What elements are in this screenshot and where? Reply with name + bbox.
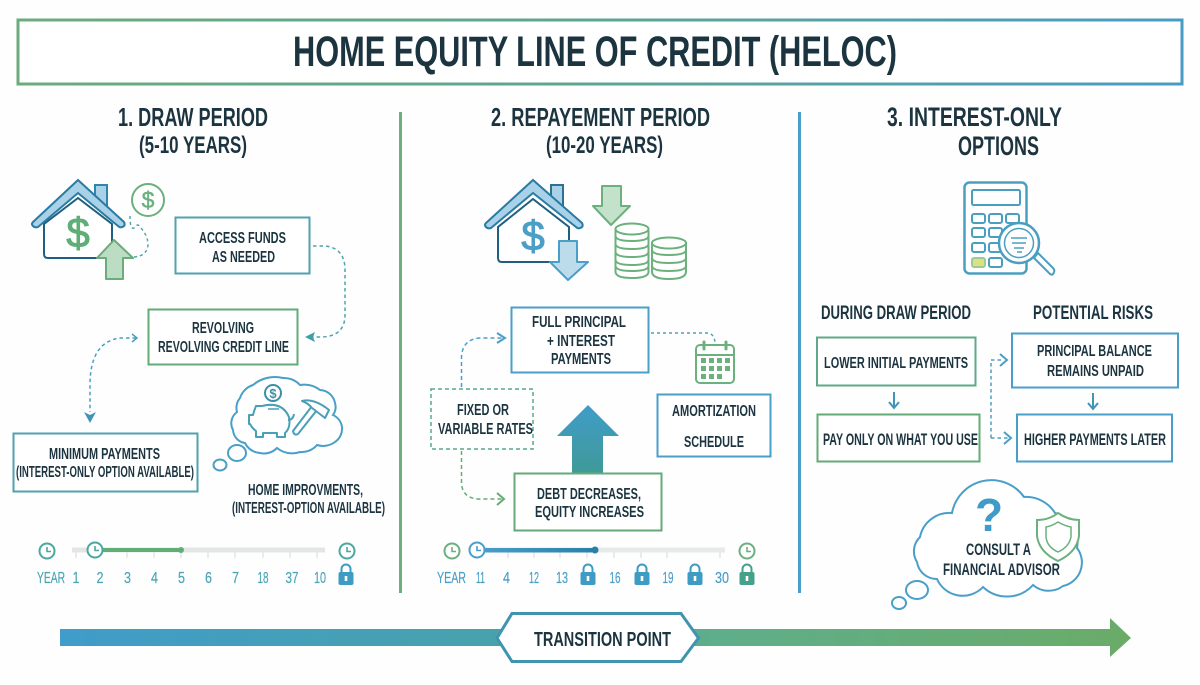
- callout: consult a financial advisor: CONSULT A: [966, 541, 1031, 559]
- box: debt decreases equity increases: EQUITY INCREASES: [535, 504, 644, 521]
- box: pay only on what you use: PAY ONLY ON WHAT YOU USE: [823, 431, 978, 449]
- heading: draw period: (5-10 YEARS): [139, 132, 247, 159]
- timeline: draw period years: 18: [258, 570, 269, 587]
- timeline: draw period years: YEAR: [37, 570, 65, 587]
- icon: house with dollar and down arrow: [485, 180, 588, 280]
- title banner: [18, 20, 1182, 84]
- box: lower initial payments: LOWER INITIAL PAYMENTS: [824, 355, 968, 372]
- box: debt decreases equity increases: DEBT DECREASES,: [537, 486, 641, 503]
- heading: draw period: [118, 102, 268, 159]
- timeline: repayment period years: YEAR: [437, 570, 466, 587]
- box: minimum payments: (INTEREST-ONLY OPTION AVAILABLE): [16, 464, 194, 481]
- arrow: lower payments to pay only: [889, 392, 899, 408]
- arrow: revolving line to minimum payments: [84, 334, 137, 423]
- icon: question mark: ?: [975, 489, 1003, 541]
- icon: dollar coin: $: [142, 187, 155, 213]
- timeline: draw period years: 2: [96, 570, 104, 587]
- heading: repayment period: (10-20 YEARS): [546, 132, 663, 159]
- box: minimum payments: [14, 434, 198, 492]
- title text: HOME EQUITY LINE OF CREDIT (HELOC): [293, 28, 897, 76]
- icon: calculator with magnifier: [964, 182, 1054, 275]
- timeline: draw period years: 4: [151, 570, 158, 587]
- connector: payments to calendar: [651, 333, 715, 342]
- box: fixed or variable rates: [431, 389, 533, 449]
- timeline: draw period years: [37, 542, 354, 587]
- timeline: repayment period years: 11: [476, 570, 485, 587]
- timeline: repayment period years: [437, 542, 754, 587]
- box: access funds: ACCESS FUNDS: [199, 230, 286, 247]
- box: amortization schedule: AMORTIZATION: [672, 403, 756, 420]
- callout: consult a financial advisor: [892, 480, 1082, 609]
- box: higher payments later: [1017, 414, 1172, 462]
- text: home improvements: HOME IMPROVMENTS,: [248, 482, 363, 499]
- icon: shield: [1037, 513, 1079, 561]
- timeline: repayment period years: 4: [503, 570, 510, 587]
- timeline: repayment period years: 12: [529, 570, 539, 587]
- timeline: repayment period years: 30: [715, 570, 729, 587]
- box: amortization schedule: [658, 394, 770, 456]
- icon: house with dollar and down arrow: $: [521, 212, 545, 259]
- timeline: repayment period years: 19: [662, 570, 674, 587]
- icon: thought cloud with piggy bank and hammer: $: [269, 386, 277, 401]
- box: principal balance remains unpaid: REMAINS UNPAID: [1047, 363, 1144, 380]
- icon: dollar coin: [132, 184, 164, 216]
- heading: repayment period: [491, 102, 710, 159]
- box: access funds: [176, 218, 310, 274]
- box: revolving credit line: REVOLVING CREDIT LINE: [158, 339, 289, 356]
- box: full principal and interest: [512, 308, 648, 372]
- heading: repayment period: 2. REPAYEMENT PERIOD: [491, 102, 710, 132]
- icon: house with dollar and up arrow: [32, 180, 133, 279]
- heading: interest-only options: [887, 102, 1062, 161]
- heading: interest-only options: OPTIONS: [958, 131, 1039, 161]
- arrow: access funds to revolving line: [305, 246, 345, 342]
- timeline: draw period years: 1: [72, 570, 80, 587]
- arrow: rates to debt decreases: [462, 451, 504, 505]
- box: fixed or variable rates: FIXED OR: [457, 402, 509, 419]
- box: full principal and interest: PAYMENTS: [551, 351, 611, 368]
- divider: draw and repayment: [399, 112, 402, 593]
- badge: transition point: TRANSITION POINT: [534, 629, 671, 651]
- arrow: dashed links to risks: [991, 354, 1011, 444]
- timeline: draw period years: 7: [232, 570, 239, 587]
- timeline: draw period years: 5: [178, 570, 185, 587]
- box: full principal and interest: FULL PRINCIPAL: [532, 314, 626, 331]
- badge: transition point: [497, 614, 698, 662]
- box: access funds: AS NEEDED: [212, 249, 275, 266]
- arrow: large up arrow: [557, 405, 619, 474]
- timeline: draw period years: 10: [314, 570, 326, 587]
- timeline: draw period years: 6: [205, 570, 212, 587]
- box: principal balance remains unpaid: [1012, 334, 1178, 388]
- panel: interest-only options: [817, 102, 1178, 609]
- icon: house with dollar and up arrow: $: [66, 209, 90, 256]
- divider: repayment and interest-only: [798, 112, 801, 593]
- connector: coin to house arrow: [130, 216, 148, 257]
- icon: green down arrow: [593, 186, 630, 225]
- box: amortization schedule: SCHEDULE: [684, 434, 744, 451]
- box: debt decreases equity increases: [514, 474, 662, 530]
- heading: draw period: 1. DRAW PERIOD: [118, 102, 268, 132]
- box: revolving credit line: [148, 310, 298, 364]
- box: lower initial payments: [817, 338, 976, 386]
- text: home improvements: (INTEREST-OPTION AVAILABLE): [232, 500, 385, 517]
- box: pay only on what you use: [818, 414, 980, 462]
- box: fixed or variable rates: VARIABLE RATES: [438, 421, 533, 438]
- heading: during draw period: DURING DRAW PERIOD: [821, 303, 971, 324]
- timeline: draw period years: 3: [124, 570, 131, 587]
- panel: draw period: [14, 102, 385, 587]
- callout: consult a financial advisor: FINANCIAL ADVISOR: [943, 561, 1060, 579]
- timeline: repayment period years: 16: [610, 570, 621, 587]
- icon: coin stacks: [616, 224, 686, 279]
- box: full principal and interest: + INTEREST: [547, 333, 615, 350]
- panel: repayment period: [431, 102, 770, 587]
- box: minimum payments: MINIMUM PAYMENTS: [49, 446, 160, 463]
- arrow: principal to higher payments: [1088, 393, 1098, 409]
- icon: calendar: [696, 342, 734, 383]
- heading: interest-only options: 3. INTEREST-ONLY: [887, 102, 1062, 132]
- arrow: rates to payments: [462, 333, 505, 387]
- icon: thought cloud with piggy bank and hammer: [214, 377, 342, 470]
- box: revolving credit line: REVOLVING: [192, 320, 254, 337]
- heading: potential risks: POTENTIAL RISKS: [1033, 303, 1153, 324]
- timeline: repayment period years: 13: [556, 570, 568, 587]
- timeline: draw period years: 37: [286, 570, 299, 587]
- box: principal balance remains unpaid: PRINCIPAL BALANCE: [1037, 343, 1152, 360]
- arrow: bottom timeline with transition point: [60, 614, 1131, 662]
- text: home improvements: [232, 482, 385, 517]
